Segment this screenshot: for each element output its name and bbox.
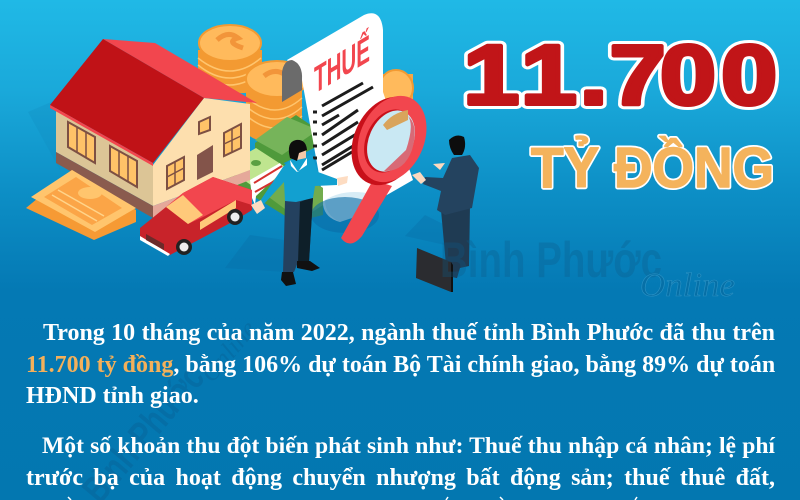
ground shadows bbox=[225, 215, 445, 272]
tax document bbox=[282, 13, 413, 222]
paragraph two: Một số khoản thu đột biến phát sinh như: Thuế thu nhập cá nhân; lệ phí bbox=[42, 433, 775, 459]
paragraph one: HĐND tỉnh giao. bbox=[26, 383, 199, 409]
watermark: Online bbox=[640, 267, 735, 304]
suit bbox=[423, 155, 479, 215]
door bbox=[197, 145, 213, 180]
paragraph one bbox=[26, 320, 775, 409]
lower green money stack bbox=[224, 147, 323, 222]
main figure: 11.700 bbox=[463, 28, 777, 122]
shoes bbox=[281, 261, 320, 286]
windows bbox=[68, 122, 95, 163]
hands bbox=[412, 163, 445, 184]
coin stacks bbox=[198, 25, 413, 145]
document lines bbox=[313, 83, 373, 170]
head bbox=[290, 145, 306, 160]
rotated watermark: Online bbox=[195, 315, 262, 388]
hands bbox=[251, 176, 348, 214]
watermark: Bình Phước bbox=[440, 232, 662, 288]
document curl bbox=[282, 60, 302, 102]
paragraph one: 11.700 tỷ đồng, bằng 106% dự toán Bộ Tài chính giao, bằng 89% dự toán bbox=[26, 352, 775, 378]
walls bbox=[56, 108, 153, 206]
sweater and arms bbox=[260, 155, 337, 204]
house bbox=[50, 39, 257, 218]
paragraph two: trước bạ của hoạt động chuyển nhượng bất động sản; thuế thuê đất, bbox=[26, 465, 775, 491]
upper green money stack bbox=[255, 115, 318, 165]
head bbox=[449, 136, 465, 155]
house shadow bbox=[28, 100, 60, 170]
document heading: THUẾ bbox=[314, 26, 370, 102]
roof bbox=[103, 39, 257, 103]
legs bbox=[441, 205, 470, 278]
paragraph two bbox=[26, 433, 776, 491]
red car bbox=[140, 177, 252, 256]
unit label: TỶ ĐỒNG bbox=[531, 135, 774, 200]
paragraph one: Trong 10 tháng của năm 2022, ngành thuế tỉnh Bình Phước đã thu trên bbox=[43, 320, 775, 346]
man in dark suit bbox=[412, 136, 479, 292]
unit label: TỶ ĐỒNG bbox=[531, 135, 774, 200]
legs bbox=[283, 197, 313, 272]
briefcase bbox=[416, 248, 451, 292]
man in blue sweater bbox=[251, 140, 348, 286]
main figure: 11.700 bbox=[463, 28, 777, 122]
magnifying glass bbox=[311, 85, 440, 244]
orange banknotes bbox=[26, 170, 136, 240]
